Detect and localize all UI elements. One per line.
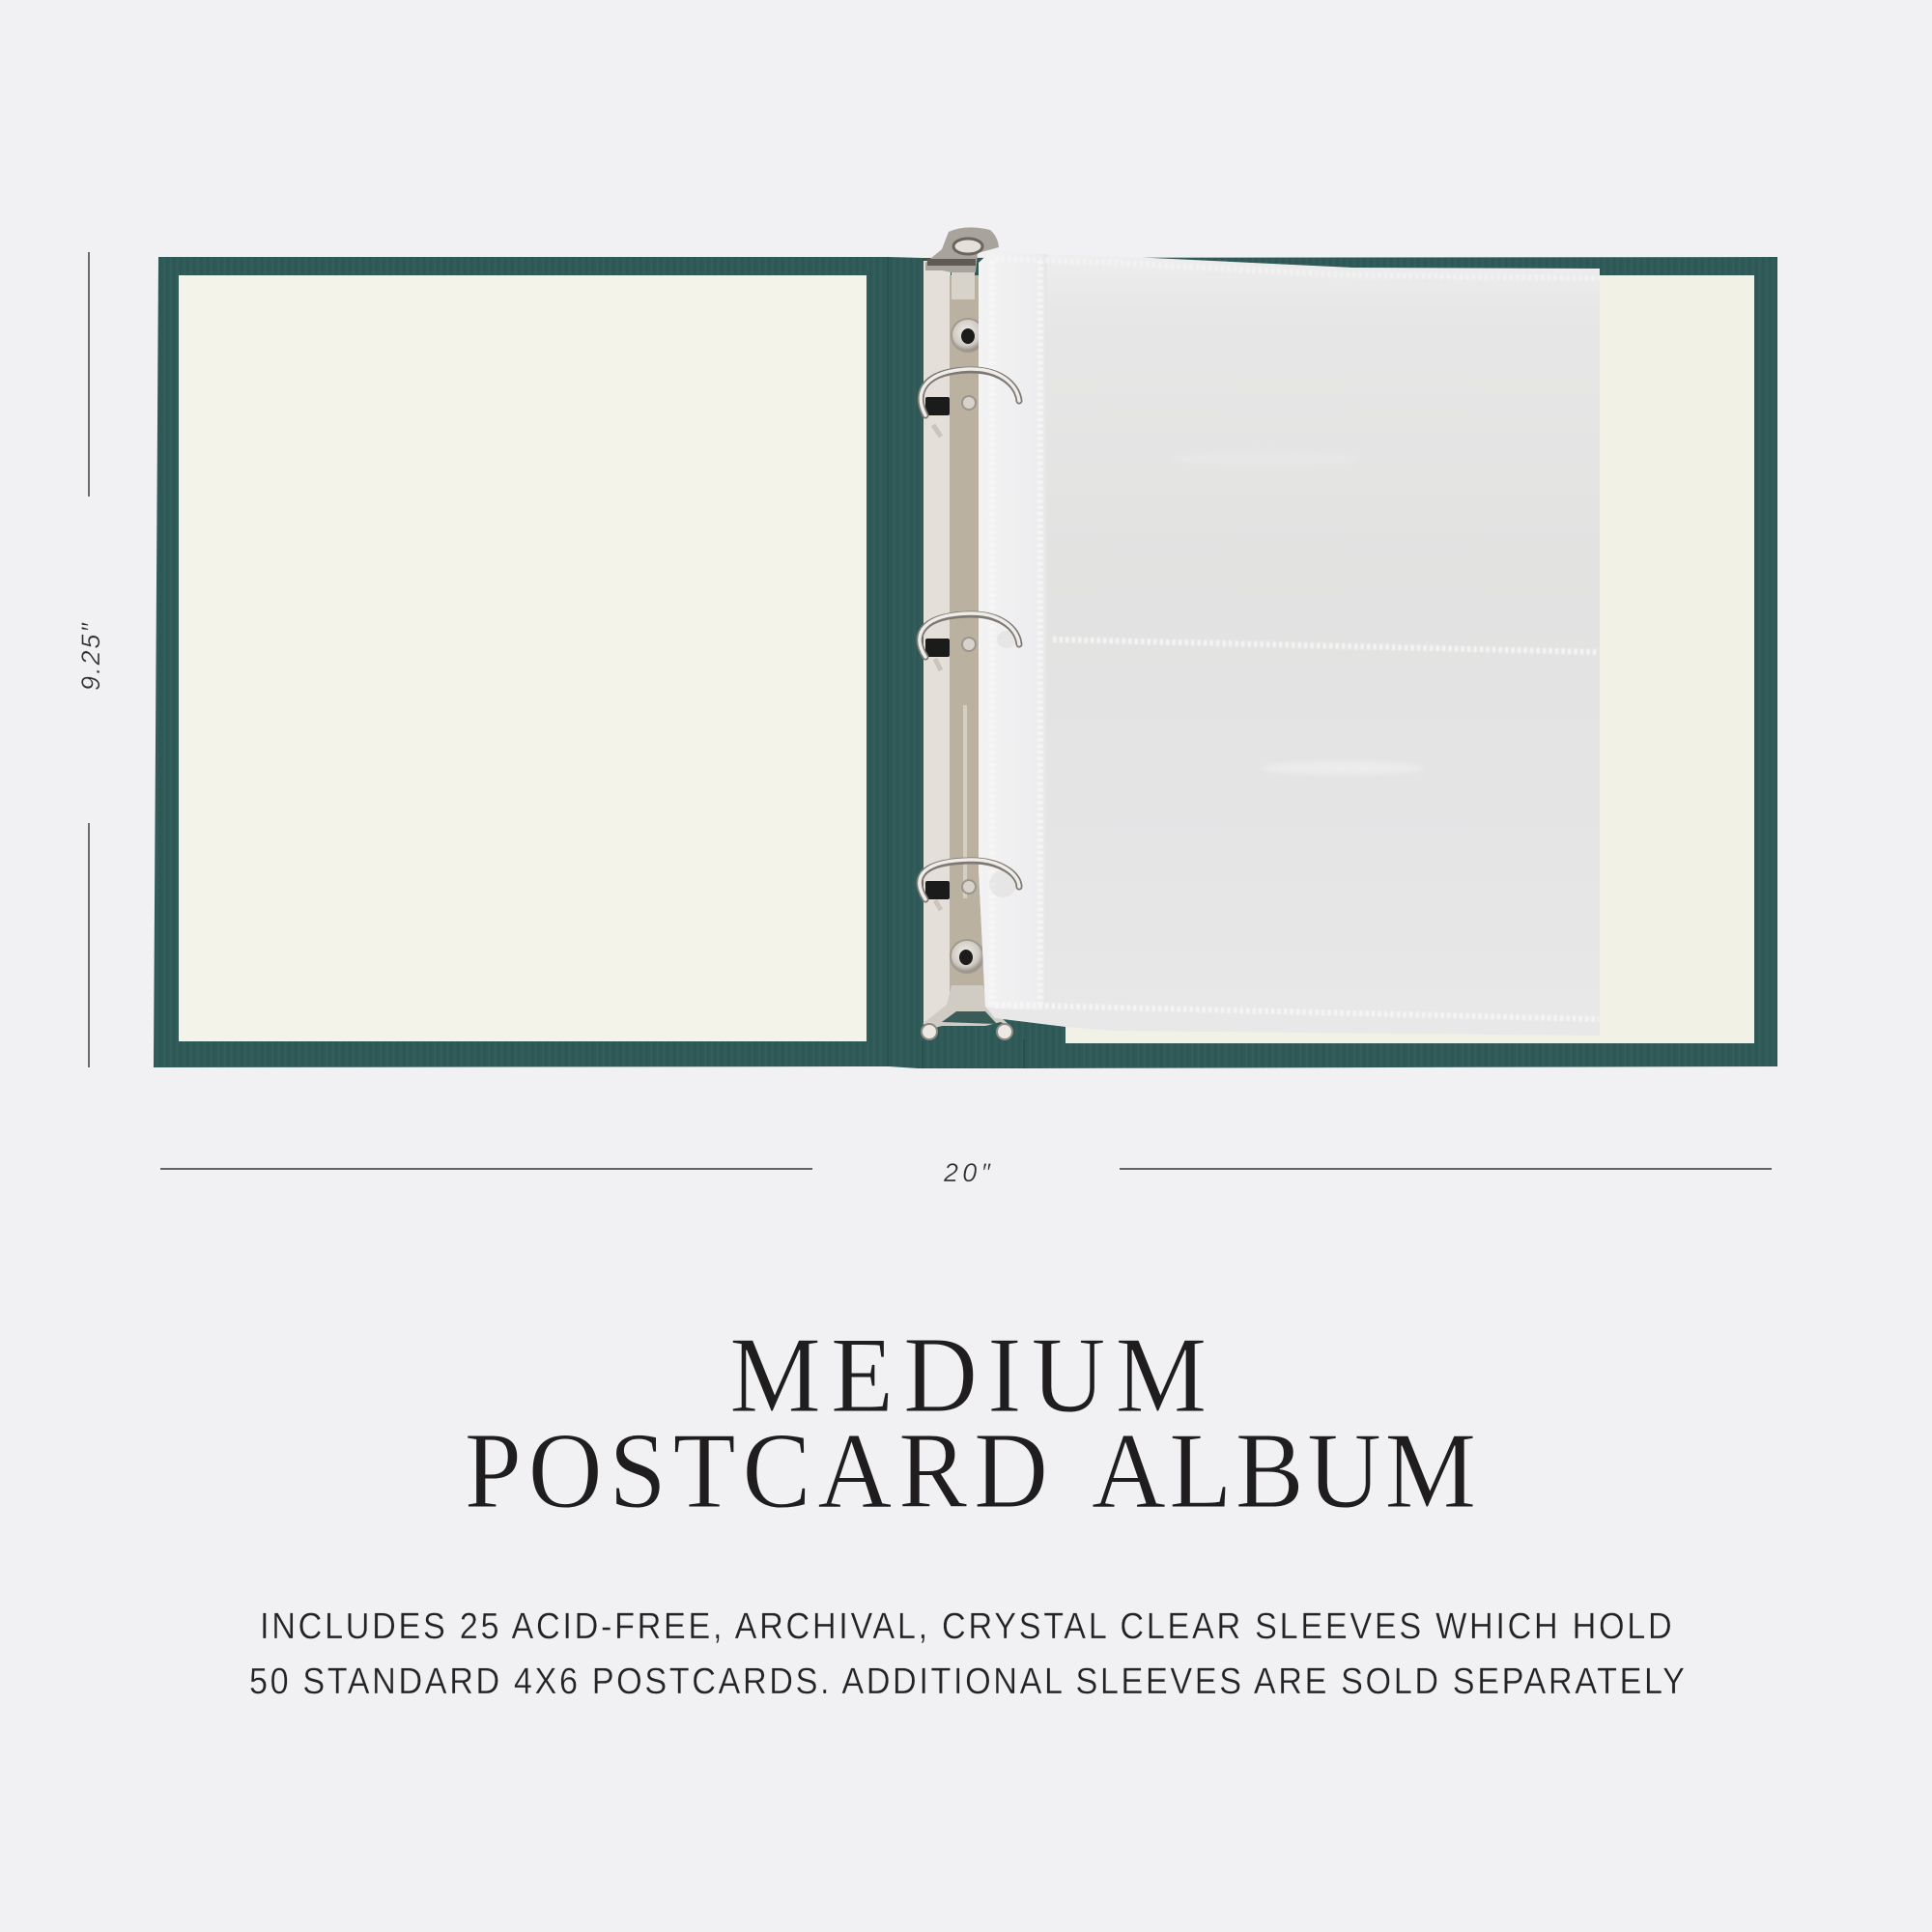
upper eyelet	[952, 319, 984, 352]
description line 1: INCLUDES 25 ACID-FREE, ARCHIVAL, CRYSTAL CLEAR SLEEVES WHICH HOLD	[260, 1605, 1672, 1646]
sleeve highlights	[1169, 450, 1425, 775]
ring punch shadows	[989, 631, 1016, 897]
height line bottom	[88, 823, 90, 1067]
description	[249, 1605, 1685, 1701]
title	[465, 1316, 1476, 1531]
binder back plate	[923, 261, 951, 1024]
description line 2: 50 STANDARD 4X6 POSTCARDS. ADDITIONAL SLEEVES ARE SOLD SEPARATELY	[249, 1660, 1685, 1701]
width line right	[1120, 1168, 1772, 1170]
title line 1: MEDIUM	[729, 1316, 1207, 1435]
width line left	[160, 1168, 812, 1170]
sleeve stitching	[992, 259, 1599, 1019]
plastic sleeve	[979, 253, 1600, 1036]
open album photo	[154, 227, 1777, 1068]
height label: 9.25″	[76, 622, 105, 691]
width label: 20″	[943, 1158, 991, 1187]
right inside page	[1065, 275, 1754, 1043]
ring 1	[921, 369, 1019, 437]
word: album: ALBUM	[1092, 1411, 1476, 1531]
ring 2	[920, 613, 1019, 670]
lower eyelet	[951, 940, 983, 973]
word: postcard: POSTCARD	[465, 1411, 1048, 1531]
ring 3	[920, 860, 1019, 910]
bottom clip	[922, 985, 1012, 1039]
top clip	[925, 227, 999, 299]
binder rings	[920, 369, 1019, 910]
spine hinge seam	[888, 257, 1024, 1068]
left inside page	[179, 275, 867, 1041]
album cover: green linen	[154, 257, 1777, 1068]
left binding strip	[979, 253, 1047, 1010]
ring binder mechanism	[922, 227, 1012, 1039]
binder metal bar	[950, 275, 988, 1005]
height line top	[88, 252, 90, 497]
title line 2	[465, 1411, 1476, 1531]
sleeve sheet	[979, 253, 1600, 1036]
